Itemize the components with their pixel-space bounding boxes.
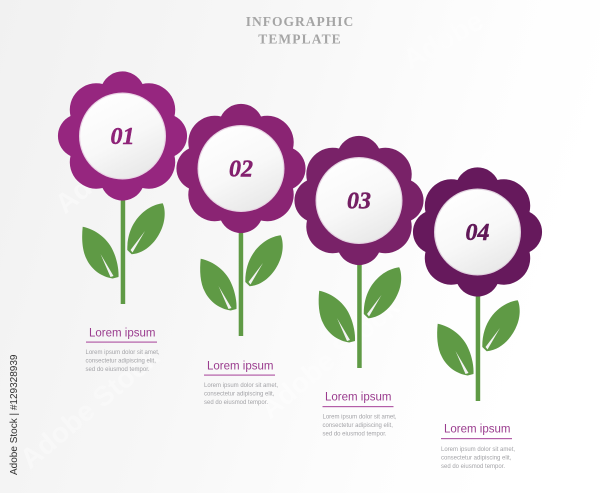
caption 2: sed do eiusmod tempor.	[204, 400, 268, 406]
flower 3: 03	[347, 188, 371, 214]
caption 4: Lorem ipsum	[444, 424, 510, 436]
step 2	[176, 104, 306, 406]
caption 2	[204, 360, 278, 406]
caption 1	[86, 328, 160, 373]
caption 1: sed do eiusmod tempor.	[86, 367, 150, 373]
caption 2: consectetur adipiscing elit,	[204, 392, 275, 398]
watermark: Adobe	[49, 140, 136, 220]
title: INFOGRAPHIC	[246, 14, 354, 29]
caption 3	[322, 392, 397, 438]
watermark: Stock	[464, 332, 543, 405]
watermark: Adobe	[398, 5, 488, 75]
caption 2: Lorem ipsum dolor sit amet,	[204, 383, 278, 389]
flower 4: 04	[466, 220, 490, 246]
caption 3: Lorem ipsum	[325, 392, 391, 404]
stem and leaves 1	[82, 195, 165, 304]
stem and leaves 4	[437, 292, 520, 401]
step 3	[294, 136, 424, 437]
watermark: Stock	[474, 107, 553, 180]
flower 1: 01	[110, 124, 134, 150]
step 1	[58, 71, 187, 373]
step 4	[413, 167, 542, 470]
caption 4	[441, 424, 515, 470]
caption 3: sed do eiusmod tempor.	[322, 432, 387, 438]
caption 4: sed do eiusmod tempor.	[441, 464, 505, 470]
stem and leaves 3	[319, 259, 401, 368]
flower 1	[58, 71, 187, 201]
caption 1: Lorem ipsum	[89, 328, 155, 340]
flower 4	[413, 167, 542, 297]
title	[246, 14, 354, 46]
title: TEMPLATE	[258, 32, 342, 46]
caption 3: consectetur adipiscing elit,	[322, 423, 393, 429]
watermark: Adobe Stock	[254, 291, 405, 425]
flower 3	[294, 136, 424, 265]
caption 2: Lorem ipsum	[207, 360, 273, 372]
flower 2	[176, 104, 306, 233]
flower 2: 02	[229, 156, 253, 182]
caption 4: Lorem ipsum dolor sit amet,	[441, 447, 515, 453]
stock credit: Adobe Stock | #129328939	[9, 354, 20, 475]
caption 1: Lorem ipsum dolor sit amet,	[86, 350, 160, 356]
caption 1: consectetur adipiscing elit,	[86, 358, 156, 364]
caption 3: Lorem ipsum dolor sit amet,	[322, 414, 397, 420]
caption 4: consectetur adipiscing elit,	[441, 456, 512, 462]
stem and leaves 2	[200, 227, 283, 336]
watermark: Adobe Stock	[14, 341, 165, 475]
